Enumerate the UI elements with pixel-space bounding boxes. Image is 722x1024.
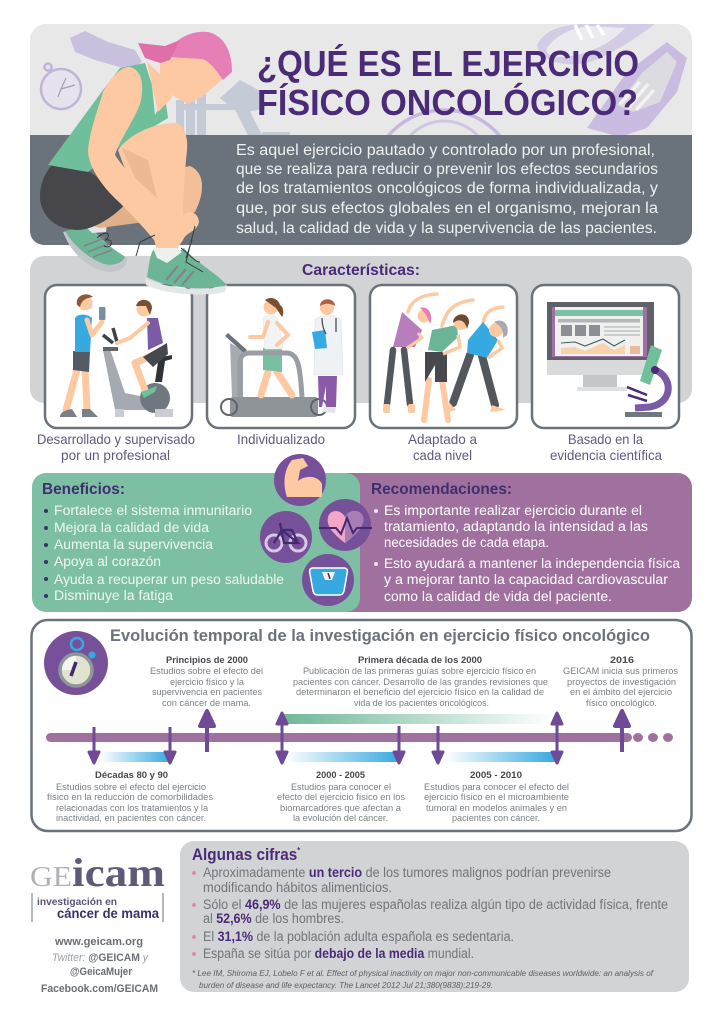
card: basado en la evidencia científica [532, 285, 679, 428]
bullets [374, 509, 378, 566]
pink headscarf [138, 32, 232, 80]
figure: treadmill [221, 333, 327, 417]
timeline text: décadas 80 y 90: relacionadas con los tratamientos y la [56, 802, 209, 813]
arm [88, 67, 199, 249]
icon: faded water bottle [70, 31, 142, 70]
arrow: double 2010 [552, 713, 562, 763]
logo: GEICAM: GE [30, 862, 72, 893]
contact links: @GeicaMujer [70, 966, 133, 978]
arrow: 2005 inicio [433, 726, 443, 763]
icon: computer monitor [547, 302, 654, 391]
caption: card labels: Individualizado [237, 431, 325, 447]
text block: definition: salud, la calidad de vida y la supervivencia de las pacientes. [236, 220, 657, 237]
arm and leg shading [122, 148, 157, 198]
benefits list: Disminuye la fatiga [54, 588, 174, 603]
back shoe [63, 223, 127, 272]
heading: algunas cifras: * [297, 846, 301, 855]
timeline text: décadas 80 y 90 [47, 769, 213, 823]
panel: características background [30, 256, 692, 403]
recommendation text: Esto ayudará a mantener la independencia física [384, 556, 680, 571]
timeline text: décadas 80 y 90: Estudios sobre el efecto del ejercicio [56, 781, 206, 792]
icon: faded stopwatch [41, 64, 81, 109]
figure: older woman in blue [448, 307, 508, 412]
icon: bicycle [260, 511, 312, 563]
arrow: 2005 fin [394, 726, 404, 763]
title: FÍSICO ONCOLÓGICO? [257, 81, 638, 123]
figure: woman in green [424, 300, 473, 420]
timeline text: principios de 2000 [150, 654, 263, 708]
front shoe [136, 226, 227, 294]
icon: faded lower shoe [587, 42, 687, 137]
timeline text: principios de 2000: ejercicio físico y la [170, 676, 245, 687]
timeline text: principios de 2000: supervivencia en pacientes [152, 686, 262, 697]
timeline text: 2016: GEICAM inicia sus primeros [563, 665, 678, 676]
woman tying her shoe [40, 32, 232, 294]
contact links: www.geicam.org [54, 936, 143, 948]
timeline text: 2016 [563, 654, 678, 708]
figure: exercise bike [103, 328, 173, 417]
hero dark band [30, 135, 692, 245]
icon: faded upper shoe [537, 24, 655, 64]
green tank top [48, 63, 168, 172]
benefits list [54, 503, 284, 603]
icon: faded barbell and weights [176, 80, 290, 135]
rear thigh shadow [93, 200, 160, 228]
text block: definition: Es aquel ejercicio pautado y controlado por un profesional, [236, 142, 655, 159]
benefits list: Mejora la calidad de vida [54, 520, 210, 535]
timeline text: primera década: pacientes con cáncer. Desarrollo de las grandes revisiones que [293, 676, 548, 687]
icon: microscope [625, 345, 668, 417]
timeline text: 2005-2010: ejercicio físico en el microambiente [424, 791, 569, 802]
caption: card labels: Basado en la [568, 431, 643, 447]
statistics list: al 52,6% de los hombres. [203, 911, 344, 926]
panel: hero header [30, 24, 692, 256]
card: desarrollado y supervisado [45, 285, 192, 428]
caption: card labels: por un profesional [61, 447, 170, 463]
text block: definition: de los tratamientos oncológicos de forma individualizada, y [236, 180, 658, 197]
recommendation text [384, 503, 680, 604]
timeline text: 2000-2005: biomarcadores que afectan a [280, 802, 402, 813]
timeline text: primera década: Publicación de las primeras guías sobre ejercicio físico en [303, 665, 536, 676]
timeline text: décadas 80 y 90: inactividad, en pacientes con cáncer. [56, 812, 206, 823]
caption: card labels [37, 431, 662, 463]
gradient bar: 2005-2010 [445, 752, 555, 762]
gradient bar: 2000-2005 [285, 752, 399, 762]
benefits list: Apoya al corazón [54, 554, 161, 569]
timeline text: décadas 80 y 90: físico en la reducción de comorbilidades [47, 791, 213, 802]
hero light background [30, 24, 692, 135]
front leg [118, 123, 187, 250]
recommendation text: necesidades de cada etapa. [384, 535, 549, 550]
timeline text: 2000-2005: efecto del ejercicio físico en los [277, 791, 405, 802]
rear knee [170, 166, 202, 225]
logo: GEICAM: icam [72, 850, 165, 895]
timeline text: 2016: en el ámbito del ejercicio [570, 686, 672, 697]
benefits list: Aumenta la supervivencia [54, 537, 213, 552]
pink bullets [192, 871, 196, 956]
gradient bar: primera década [282, 714, 556, 724]
contact links: Twitter: @GEICAM y [52, 952, 149, 964]
contact links: Facebook.com/GEICAM [41, 983, 158, 995]
footnote [192, 969, 654, 990]
text block: definition [236, 142, 658, 237]
timeline text: 2005-2010: pacientes con cáncer. [452, 812, 540, 823]
icon: weighing scale [302, 554, 354, 606]
benefits list: Ayuda a recuperar un peso saludable [54, 572, 284, 587]
timeline axis [46, 733, 673, 742]
icon: faded ring [386, 108, 502, 135]
faded background gym icons [40, 24, 687, 135]
card: individualizado [207, 285, 355, 428]
heading: características: Características: [302, 262, 420, 279]
arrow: décadas 80 inicio [89, 727, 99, 763]
statistics list: modificando hábitos alimenticios. [203, 880, 392, 895]
figure: doctor [312, 299, 343, 413]
caption: card labels: Desarrollado y supervisado [37, 431, 195, 447]
icon: flexed arm [274, 454, 326, 506]
footnote: burden of disease and life expectancy. The Lancet 2012 Jul 21;380(9838):219-29. [199, 981, 493, 990]
panel: timeline [32, 620, 692, 831]
logo: GEICAM [30, 850, 165, 922]
neck and chest [147, 62, 172, 112]
timeline text: 2005-2010: tumoral en modelos animales y en [426, 802, 567, 813]
heading: recomendaciones: Recomendaciones: [371, 481, 512, 498]
figure: trainer [60, 294, 106, 417]
shorts [40, 164, 127, 230]
statistics list: España se sitúa por debajo de la media mundial. [203, 946, 474, 961]
arrow: double primera década [277, 713, 287, 763]
figure: runner [250, 298, 292, 395]
timeline text: principios de 2000: Principios de 2000 [166, 654, 248, 665]
bullets [44, 509, 48, 598]
timeline text: primera década: vida de los pacientes oncológicos. [354, 697, 489, 708]
timeline text: 2005-2010: 2005 - 2010 [470, 769, 522, 780]
gradient bar: décadas 80 y 90 [100, 752, 170, 762]
recommendation text: Es importante realizar ejercicio durante el [384, 503, 642, 518]
timeline text: 2000-2005: la evolución del cáncer. [293, 812, 388, 823]
timeline text: primera década [293, 654, 548, 708]
title: ¿QUÉ ES EL EJERCICIO [257, 43, 639, 84]
panel: algunas cifras [180, 841, 689, 992]
caption: card labels: cada nivel [413, 447, 472, 463]
caption: card labels: Adaptado a [408, 431, 477, 447]
arrow: décadas 80 fin [165, 727, 175, 763]
icon: stopwatch [44, 631, 108, 695]
title [257, 43, 639, 123]
timeline text: 2005-2010 [424, 769, 569, 823]
contact links [41, 936, 158, 995]
statistics list: El 31,1% de la población adulta española es sedentaria. [203, 929, 514, 944]
head [160, 50, 224, 104]
arrow: 2016 [615, 711, 629, 752]
logo: GEICAM: investigación en [37, 896, 117, 908]
figure: woman with pink headscarf [383, 294, 437, 413]
text block: definition: que, por sus efectos globales en el organismo, mejoran la [236, 200, 658, 217]
timeline text: décadas 80 y 90: Décadas 80 y 90 [95, 769, 168, 780]
benefits list: Fortalece el sistema inmunitario [54, 503, 252, 518]
logo: GEICAM: cáncer de mama [57, 906, 159, 921]
recommendation text: como la calidad de vida del paciente. [384, 589, 612, 604]
timeline text: principios de 2000: Estudios sobre el efecto del [150, 665, 263, 676]
recommendation text: tratamiento, adaptando la intensidad a las [384, 519, 648, 534]
timeline text: 2016: 2016 [610, 654, 634, 665]
timeline text: 2016: proyectos de investigación [567, 676, 676, 687]
panel: recomendaciones [340, 473, 692, 612]
heading: timeline: Evolución temporal de la investigación en ejercicio físico oncológico [110, 626, 650, 645]
figure: treadmill handrail [240, 353, 302, 397]
statistics list: Aproximadamente un tercio de los tumores malignos podrían prevenirse [203, 865, 611, 880]
text block: definition: que se realiza para reducir o prevenir los efectos secundarios [236, 161, 658, 178]
timeline text: primera década: Primera década de los 2000 [358, 654, 482, 665]
statistics list: Sólo el 46,9% de las mujeres españolas realiza algún tipo de actividad física, frente [203, 897, 668, 912]
timeline text: 2016: físico oncológico. [586, 697, 657, 708]
timeline text: 2005-2010: Estudios para conocer el efecto del [424, 781, 569, 792]
caption: card labels: evidencia científica [550, 447, 662, 463]
panel: beneficios [32, 473, 360, 612]
timeline text: 2000-2005: Estudios para conocer el [291, 781, 391, 792]
heading: algunas cifras: Algunas cifras [192, 845, 309, 864]
statistics list [203, 865, 668, 961]
timeline text: principios de 2000: con cáncer de mama. [162, 697, 251, 708]
timeline text: 2000-2005: 2000 - 2005 [316, 769, 365, 780]
arrow: principios de 2000 [200, 711, 214, 752]
card: adaptado a cada nivel [370, 285, 517, 428]
icon: heart with pulse [319, 499, 372, 551]
heading: beneficios: Beneficios: [42, 481, 125, 498]
recommendation text: y a mejorar tanto la capacidad cardiovascular [384, 572, 669, 587]
figure: cyclist [117, 300, 168, 398]
timeline text: primera década: determinaron el beneficio del ejercicio físico en la calidad de [296, 686, 544, 697]
timeline text: 2000-2005 [277, 769, 405, 823]
footnote: * Lee IM, Shiroma EJ, Lobelo F et al. Effect of physical inactivity on major non-communicable diseases worldwide: an analysis of [192, 969, 654, 978]
